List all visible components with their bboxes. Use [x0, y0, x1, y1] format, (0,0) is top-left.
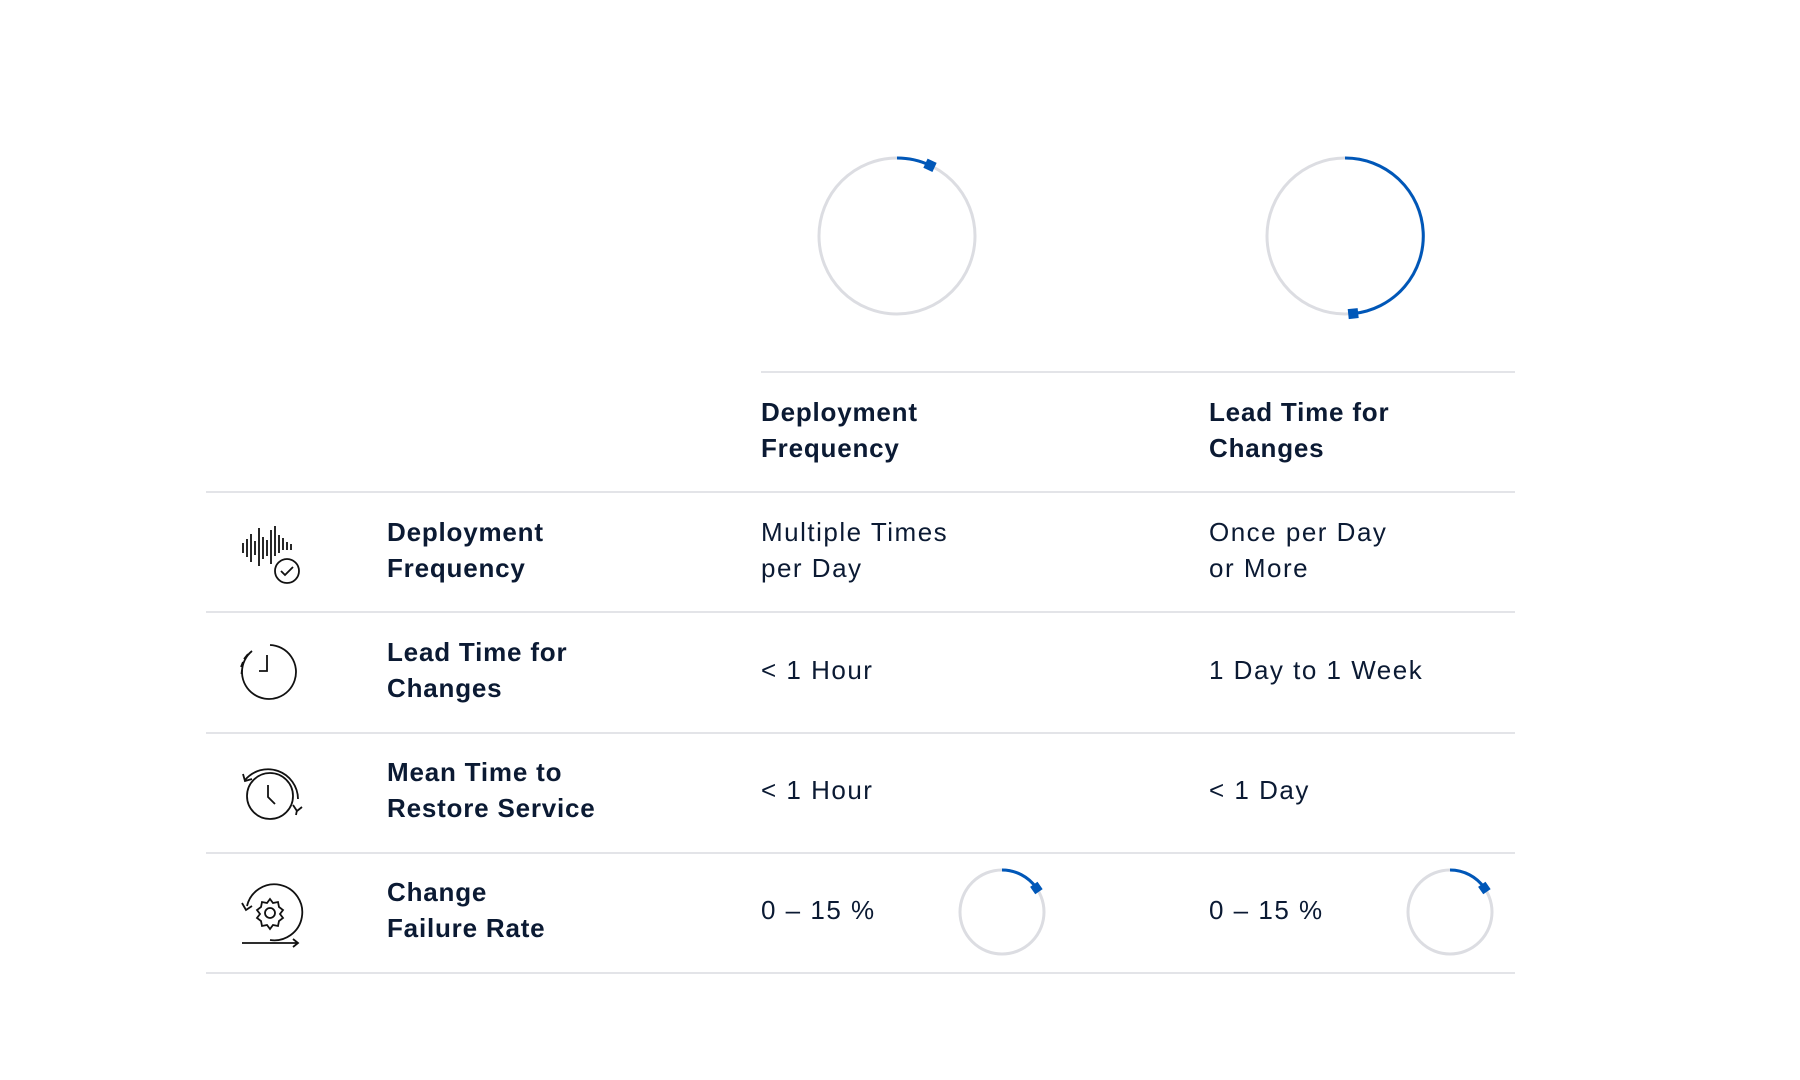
header: deployment frequency	[761, 397, 918, 463]
row 3 values: < 1 Hour	[761, 775, 873, 805]
icon: gear cycle	[242, 884, 302, 947]
row 1 values: per Day	[761, 553, 863, 583]
row 1 values	[761, 517, 948, 583]
row 4 label: Failure Rate	[387, 913, 545, 943]
row 3 label: Restore Service	[387, 793, 596, 823]
header line	[761, 371, 1515, 373]
row 4 label	[387, 877, 545, 943]
row 2 label: Lead Time for	[387, 637, 567, 667]
row 1 values: Multiple Times	[761, 517, 948, 547]
text: < 1 Day	[1209, 775, 1310, 805]
row 1 label: Deployment	[387, 517, 544, 547]
row 1 label	[387, 517, 544, 583]
header: lead time: Lead Time for	[1209, 397, 1389, 427]
row 2 label: Changes	[387, 673, 502, 703]
text: 1 Day to 1 Week	[1209, 655, 1423, 685]
header: lead time	[1209, 397, 1389, 463]
header: lead time: Changes	[1209, 433, 1324, 463]
row 4 label: Change	[387, 877, 487, 907]
small gauge col2	[1408, 870, 1492, 954]
gauge: lead time	[1267, 158, 1423, 319]
row 2 values: < 1 Hour	[761, 655, 873, 685]
header: deployment frequency: Deployment	[761, 397, 918, 427]
text: or More	[1209, 553, 1309, 583]
row 3 label	[387, 757, 596, 823]
icon: waveform check	[243, 526, 299, 583]
row 2 label	[387, 637, 567, 703]
text: 0 – 15 %	[1209, 895, 1324, 925]
icon: clock dashed	[241, 645, 296, 699]
text: Once per Day	[1209, 517, 1387, 547]
gauge: deployment frequency	[819, 158, 975, 314]
row 3 label: Mean Time to	[387, 757, 562, 787]
icon: restore clock	[243, 769, 302, 819]
row 1 label: Frequency	[387, 553, 526, 583]
header: deployment frequency: Frequency	[761, 433, 900, 463]
small gauge col1	[960, 870, 1044, 954]
row 4 values: 0 – 15 %	[761, 895, 876, 925]
